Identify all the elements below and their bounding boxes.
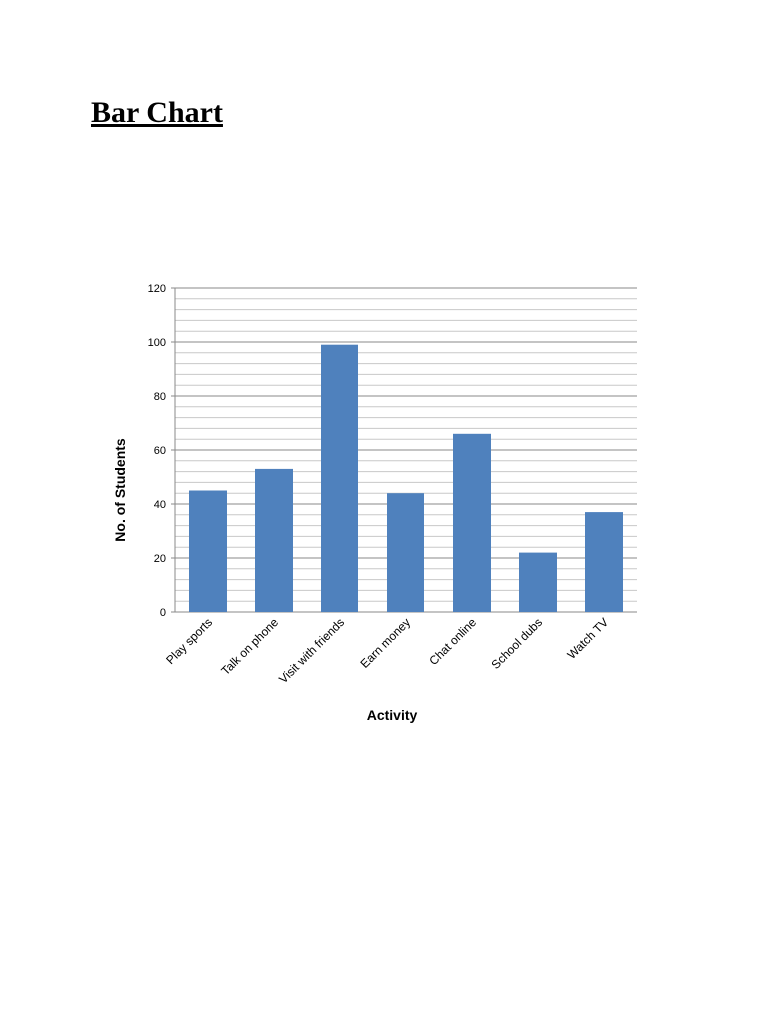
y-axis tick labels: 60 (154, 445, 166, 457)
y-axis tick labels: 120 (148, 283, 166, 295)
x-axis category labels: Play sports (163, 615, 215, 667)
y-axis tick labels: 80 (154, 391, 166, 403)
y-axis tick labels: 0 (160, 607, 166, 619)
x-axis category labels: Visit with friends (276, 615, 347, 686)
y-axis title: No. of Students (112, 438, 128, 542)
bars (189, 345, 623, 612)
y-axis tick labels: 100 (148, 337, 166, 349)
y-axis tick labels (148, 283, 166, 619)
y-axis tick labels: 20 (154, 553, 166, 565)
y-axis tick labels: 40 (154, 499, 166, 511)
x-axis category labels (163, 615, 611, 686)
title: Bar Chart (91, 96, 223, 129)
x-axis category labels: Chat online (426, 615, 479, 668)
x-axis category labels: Talk on phone (218, 615, 281, 678)
x-axis category labels: Earn money (357, 615, 413, 671)
x-axis category labels: Watch TV (564, 615, 611, 662)
x-axis title: Activity (367, 707, 417, 723)
x-axis category labels: School dubs (489, 615, 545, 672)
